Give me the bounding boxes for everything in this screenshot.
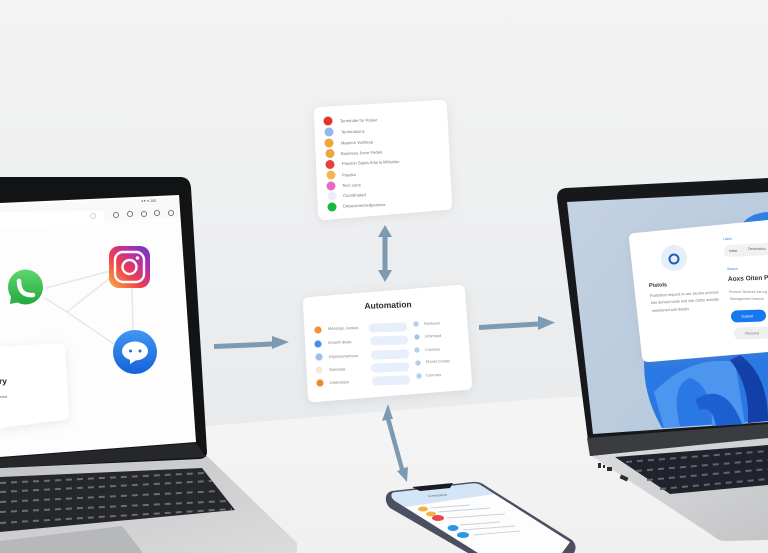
automation left rows <box>314 325 358 387</box>
desk surface <box>0 388 768 553</box>
checklist rows: Passion Sijura Arturia Mihrafun <box>342 159 400 166</box>
right laptop base <box>590 438 768 541</box>
arrow: left laptop to automation <box>214 336 289 349</box>
automation left rows: Growth deals <box>328 339 352 345</box>
right laptop lid <box>557 178 768 456</box>
checklist rows: Tech vans <box>342 182 361 188</box>
summary card <box>0 343 69 428</box>
phone <box>386 482 576 553</box>
checklist rows: Terminate for Kaiser <box>340 117 378 123</box>
automation right rows: Reshover <box>424 321 441 326</box>
panel: checklist <box>314 100 452 220</box>
automation left rows: Dignesonamous <box>329 353 358 359</box>
arrow: automation to right laptop <box>479 316 555 330</box>
keyboard key rows <box>626 451 768 489</box>
phone title: Conversations <box>428 493 448 498</box>
right laptop keyboard <box>615 445 768 494</box>
checklist rows: Coordinated <box>343 192 367 198</box>
status bar text: ◂ ▾ ▪▪ 100 <box>141 199 156 203</box>
secondary button: Rescind <box>745 332 759 336</box>
icon: whatsapp <box>8 270 43 304</box>
phone notch <box>412 483 453 491</box>
right laptop chin <box>587 424 768 456</box>
right laptop <box>557 178 768 541</box>
phone screen <box>391 483 570 553</box>
dialog right form <box>723 237 768 340</box>
checklist rows: Dataconnectedpensive <box>343 202 386 208</box>
automation right rows: Ethirhood <box>425 334 441 338</box>
toolbar icons <box>113 210 174 218</box>
checklist rows <box>324 116 400 212</box>
dialog right form: Management Session <box>730 297 764 301</box>
primary button: Submit <box>741 314 754 318</box>
dialog left text: mentioned and details <box>652 307 689 313</box>
right laptop screen <box>567 192 768 434</box>
left laptop chin <box>0 443 206 468</box>
keyboard key rows <box>0 473 232 523</box>
icon: profile badge <box>661 245 687 271</box>
icon: chat bubble <box>113 330 157 374</box>
left laptop base <box>0 456 297 553</box>
icon: instagram <box>109 246 150 288</box>
checklist rows: Terminations <box>341 129 365 134</box>
automation right rows: Cancrots <box>426 373 441 377</box>
automation right rows: Cuestras <box>425 347 440 352</box>
left laptop <box>0 177 297 553</box>
left laptop lid <box>0 177 207 468</box>
phone body <box>386 482 576 553</box>
dialog right form: Label <box>723 237 732 241</box>
dialog card <box>629 220 768 362</box>
dialog left text: Pistols <box>649 282 667 289</box>
wallpaper: blue bloom <box>644 212 768 428</box>
automation left rows: Direination <box>330 379 349 385</box>
phone header <box>391 483 494 507</box>
automation title: Automation <box>364 299 412 311</box>
checklist rows: Maurice Vontlesa <box>341 139 374 145</box>
checklist rows: Paseka <box>342 172 357 177</box>
browser toolbar <box>0 197 180 228</box>
right laptop ports <box>598 463 628 482</box>
left laptop screen <box>0 195 196 457</box>
left laptop trackpad <box>0 526 143 553</box>
arrow: top panel to automation panel <box>378 225 392 282</box>
automation right rows: Ehroet Cristas <box>426 359 450 364</box>
dialog left text: Pasttdiom request to are Jacetia process <box>650 290 719 298</box>
automation right rows <box>413 321 450 379</box>
dialog right form: Search <box>727 267 738 271</box>
dialog left text <box>649 282 719 313</box>
phone list <box>418 505 520 538</box>
automation left rows: Meetings, karoas <box>328 325 358 331</box>
summary card text <box>0 376 7 399</box>
dialog right form: Procure Services the log <box>729 290 767 294</box>
automation centre pills <box>369 322 410 386</box>
connection lines <box>45 271 133 344</box>
checklist rows: Business Jorce Fedek <box>341 150 383 156</box>
dialog right form: Inline <box>729 249 737 253</box>
automation left rows: Sanrsara <box>329 366 346 372</box>
dialog right form: Destination <box>748 247 766 251</box>
address bar <box>0 211 104 228</box>
wall background <box>0 0 768 430</box>
arrow: automation panel to phone <box>382 404 408 482</box>
left laptop keyboard <box>0 468 235 532</box>
panel: automation <box>303 285 472 402</box>
dialog left text: has derived code and site clarity actually <box>651 297 719 305</box>
